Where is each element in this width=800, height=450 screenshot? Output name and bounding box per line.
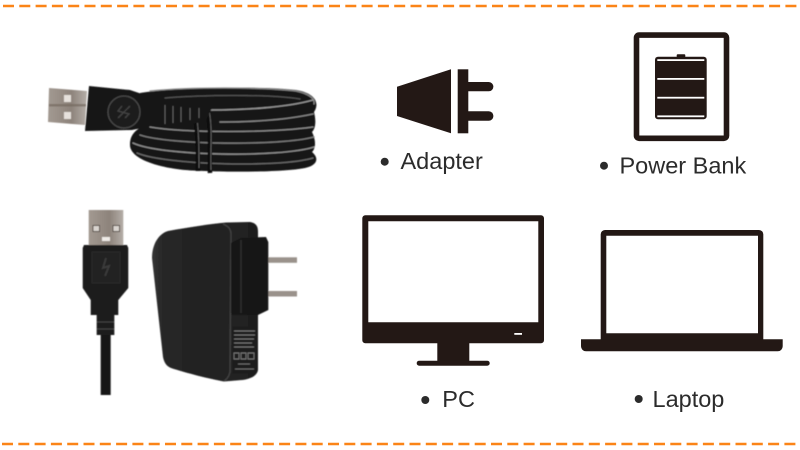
adapter housing <box>152 222 258 382</box>
icon: PC monitor <box>362 215 544 366</box>
strain relief <box>97 314 114 335</box>
photo: USB plug with cable <box>83 210 128 395</box>
label: Adapter: Adapter <box>400 148 483 174</box>
USB metal plug <box>48 88 87 125</box>
label: Power Bank: Power Bank <box>620 152 746 178</box>
rating label <box>233 327 256 373</box>
label: Laptop: Laptop <box>652 386 724 412</box>
cable ties <box>194 108 210 173</box>
prongs <box>250 257 297 263</box>
metal plug <box>89 210 123 245</box>
icon: power bank <box>636 35 726 138</box>
label: PC <box>421 386 475 412</box>
photo: wall adapter <box>152 222 297 382</box>
cable <box>101 333 111 395</box>
photo: coiled USB cable <box>48 86 316 173</box>
strain relief <box>148 100 212 126</box>
label: PC: PC <box>442 386 475 412</box>
plug block <box>231 237 268 315</box>
plug body <box>83 245 128 315</box>
connector body <box>85 86 157 131</box>
icon: adapter plug <box>397 69 493 133</box>
icon: laptop <box>581 230 783 351</box>
cable coil <box>130 88 316 172</box>
